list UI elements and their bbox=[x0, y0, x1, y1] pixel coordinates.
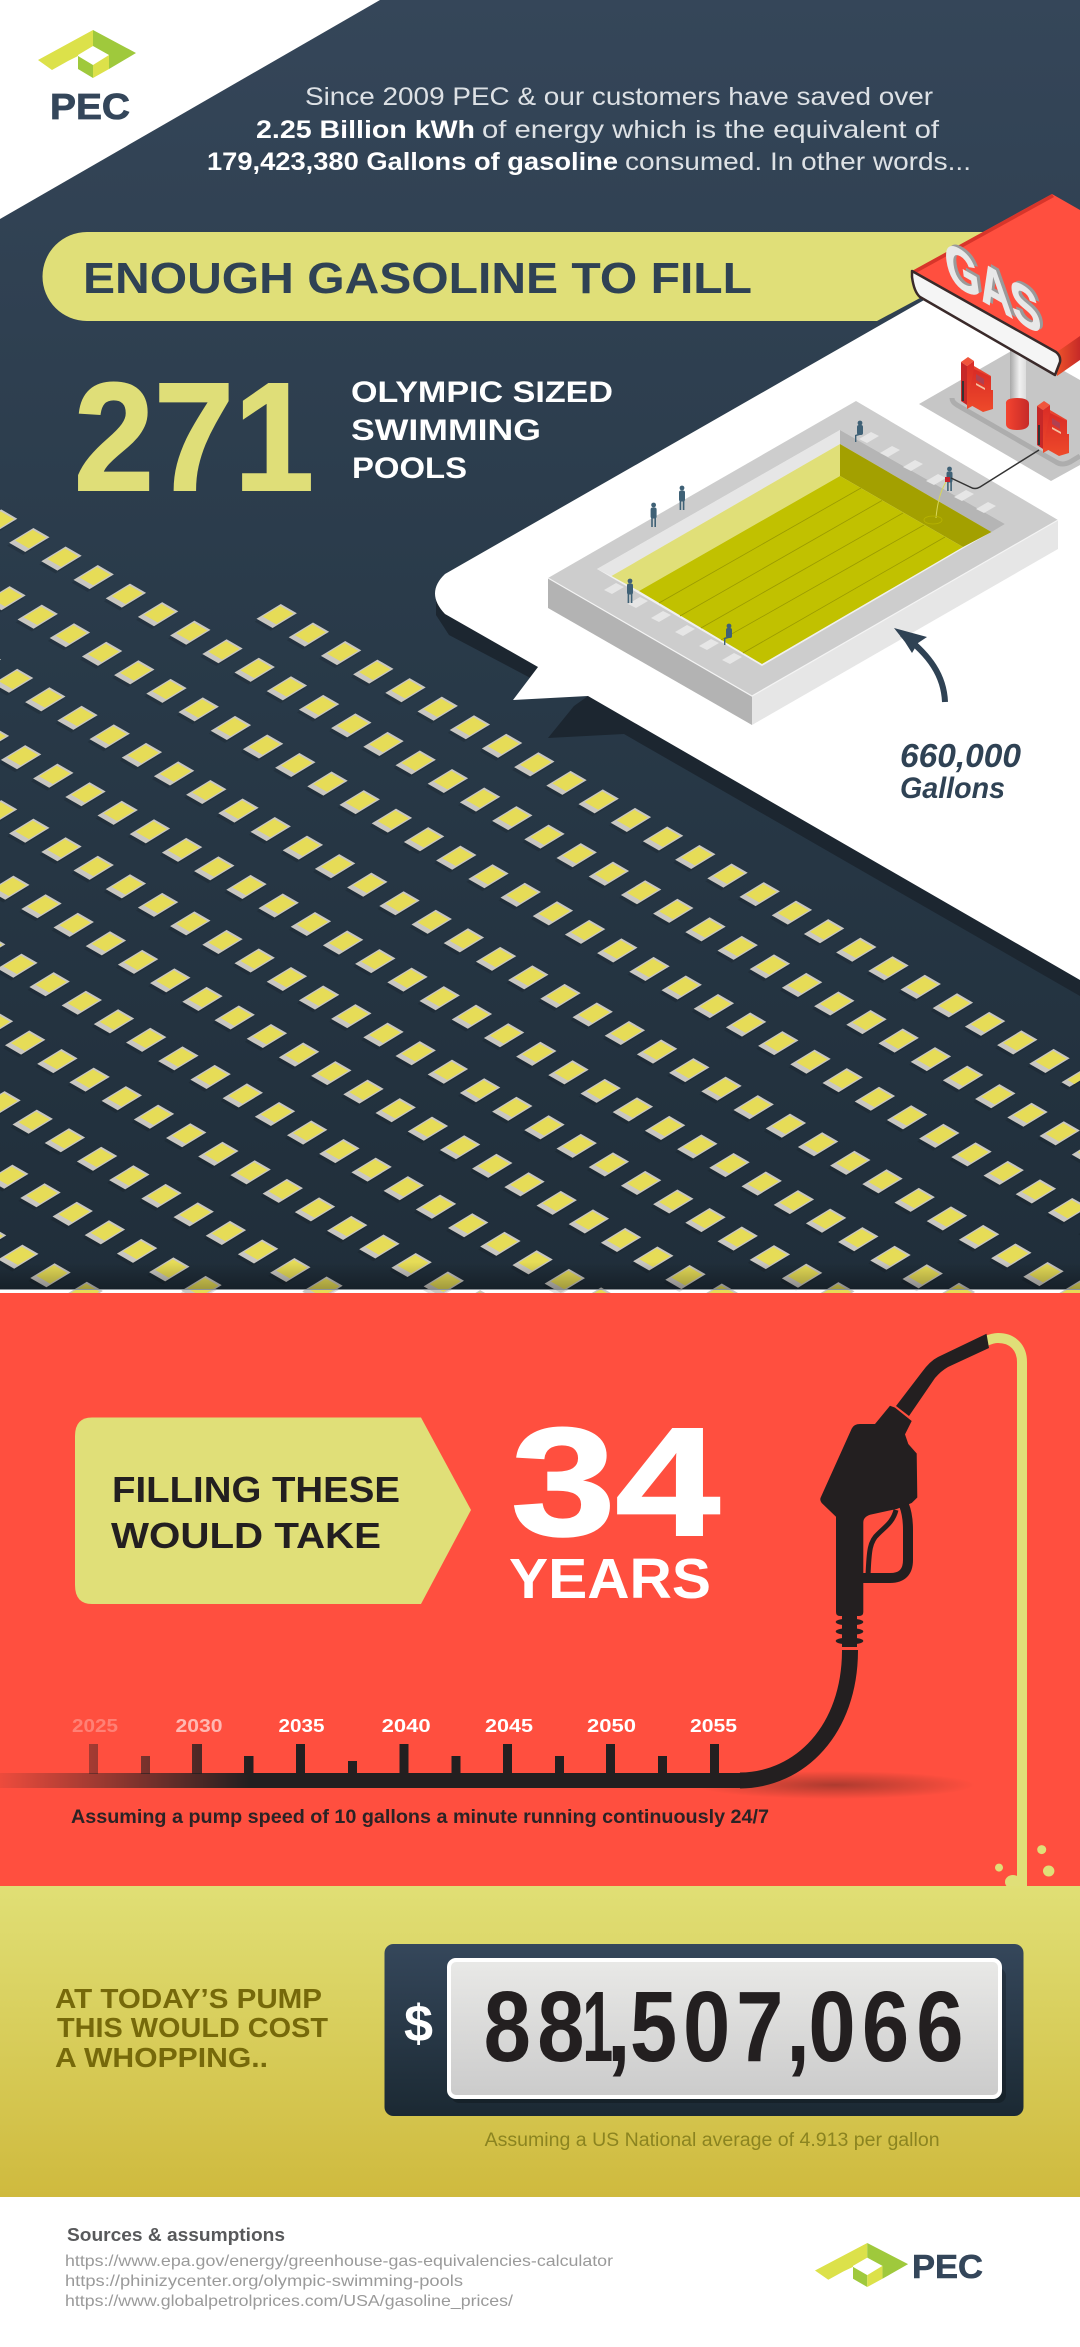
heading: cost: AT TODAY’S PUMP bbox=[55, 1983, 322, 2014]
heading: cost: THIS WOULD COST bbox=[57, 2012, 328, 2043]
logo: PEC footer bbox=[815, 2243, 983, 2287]
pool walls and gasoline bbox=[612, 444, 992, 664]
label: 660,000 gallons bbox=[900, 737, 1022, 805]
timeline year labels: 2030 bbox=[176, 1716, 222, 1736]
illustration: swimming pool of gasoline bbox=[548, 401, 1058, 725]
stat: 271 olympic sized swimming pools: POOLS bbox=[352, 452, 467, 485]
icon: fuel pump right bbox=[1037, 401, 1069, 456]
heading: cost bbox=[55, 1983, 328, 2073]
icon: fuel nozzle and hose bbox=[740, 1334, 989, 1780]
note: pump speed assumption: Assuming a pump speed of 10 gallons a minute running continuously 24/7 bbox=[71, 1807, 769, 1828]
intro text bbox=[207, 83, 971, 176]
pool inner rim bbox=[597, 430, 1005, 666]
pool sides bbox=[548, 578, 752, 725]
panel: footer sources bbox=[0, 2197, 1080, 2347]
stat: 271 olympic sized swimming pools: 271 bbox=[74, 351, 314, 523]
timeline year labels: 2045 bbox=[485, 1716, 533, 1736]
speech bubble with shadow bbox=[435, 220, 1080, 996]
heading: sources: Sources & assumptions bbox=[67, 2225, 285, 2245]
meter digits: 88 bbox=[484, 1970, 584, 2083]
stat: 34 years: YEARS bbox=[509, 1547, 711, 1611]
meter digits: 066 bbox=[808, 1970, 964, 2083]
source links: https://phinizycenter.org/olympic-swimming-pools bbox=[65, 2273, 463, 2290]
canopy lettering GAS: GAS bbox=[940, 227, 1045, 348]
callout: filling these would take bbox=[75, 1418, 471, 1604]
people around pool bbox=[627, 421, 952, 645]
stat: 271 olympic sized swimming pools: OLYMPIC SIZED bbox=[351, 376, 613, 409]
intro text: consumed. In other words... bbox=[625, 148, 971, 176]
pole bbox=[1006, 345, 1029, 430]
timeline year labels: 2035 bbox=[278, 1716, 324, 1736]
stat: 34 years bbox=[509, 1396, 720, 1611]
canopy lettering GAS: GAS bbox=[943, 226, 1048, 347]
meter digits: ,507, bbox=[607, 1970, 810, 2083]
fuel hose and stream into pool bbox=[924, 450, 1039, 524]
source links: https://www.globalpetrolprices.com/USA/gasoline_prices/ bbox=[65, 2293, 514, 2310]
intro text: of energy which is the equivalent of bbox=[482, 116, 939, 144]
meter panel: $ bbox=[404, 1995, 433, 2053]
panel: yellow cost section bbox=[0, 1886, 1080, 2197]
timeline year labels bbox=[72, 1716, 737, 1736]
timeline year labels: 2055 bbox=[690, 1716, 737, 1736]
starting blocks bbox=[604, 432, 996, 664]
icon: fuel pump left bbox=[961, 357, 993, 412]
hose shadow bbox=[695, 1771, 975, 1799]
meter panel bbox=[384, 1944, 1024, 2116]
heading banner: enough gasoline to fill: ENOUGH GASOLINE TO FILL bbox=[83, 254, 752, 303]
timeline year labels: 2050 bbox=[587, 1716, 636, 1736]
arrow to pool bbox=[894, 628, 945, 702]
stat: 271 olympic sized swimming pools: SWIMMING bbox=[351, 414, 541, 447]
logo: PEC footer: PEC bbox=[912, 2248, 983, 2285]
timeline year labels: 2025 bbox=[72, 1716, 118, 1736]
timeline year labels: 2040 bbox=[382, 1716, 431, 1736]
meter digits: 1 bbox=[582, 1972, 613, 2083]
heading banner: enough gasoline to fill bbox=[42, 232, 990, 321]
logo: PEC top bbox=[38, 30, 136, 127]
station pad bbox=[919, 346, 1080, 481]
label: 660,000 gallons: 660,000 bbox=[900, 737, 1022, 774]
intro text: 179,423,380 Gallons of gasoline bbox=[207, 148, 618, 176]
timeline hose with ticks bbox=[0, 1744, 742, 1788]
panel: red pump section bbox=[0, 1293, 1080, 1890]
canopy bbox=[912, 194, 1080, 376]
label: 660,000 gallons: Gallons bbox=[900, 772, 1005, 805]
source links: https://www.epa.gov/energy/greenhouse-gas-equivalencies-calculator bbox=[65, 2253, 614, 2270]
illustration: gas station bbox=[912, 194, 1080, 481]
heading: cost: A WHOPPING.. bbox=[55, 2042, 268, 2073]
callout: filling these would take: WOULD TAKE bbox=[111, 1515, 381, 1556]
pool tiles grid bbox=[0, 368, 1080, 1909]
logo: PEC top: PEC bbox=[50, 86, 130, 127]
meter digits bbox=[484, 1970, 964, 2083]
stat: 34 years: 34 bbox=[511, 1396, 720, 1568]
intro text: 2.25 Billion kWh bbox=[256, 116, 475, 144]
intro text: Since 2009 PEC & our customers have saved over bbox=[305, 83, 933, 111]
stat: 271 olympic sized swimming pools bbox=[74, 351, 613, 523]
pool deck bbox=[548, 401, 1058, 696]
note: national average: Assuming a US National average of 4.913 per gallon bbox=[485, 2130, 940, 2151]
gasoline stream and droplets bbox=[986, 1338, 1054, 1890]
callout: filling these would take: FILLING THESE bbox=[112, 1469, 400, 1510]
source links bbox=[65, 2253, 614, 2310]
